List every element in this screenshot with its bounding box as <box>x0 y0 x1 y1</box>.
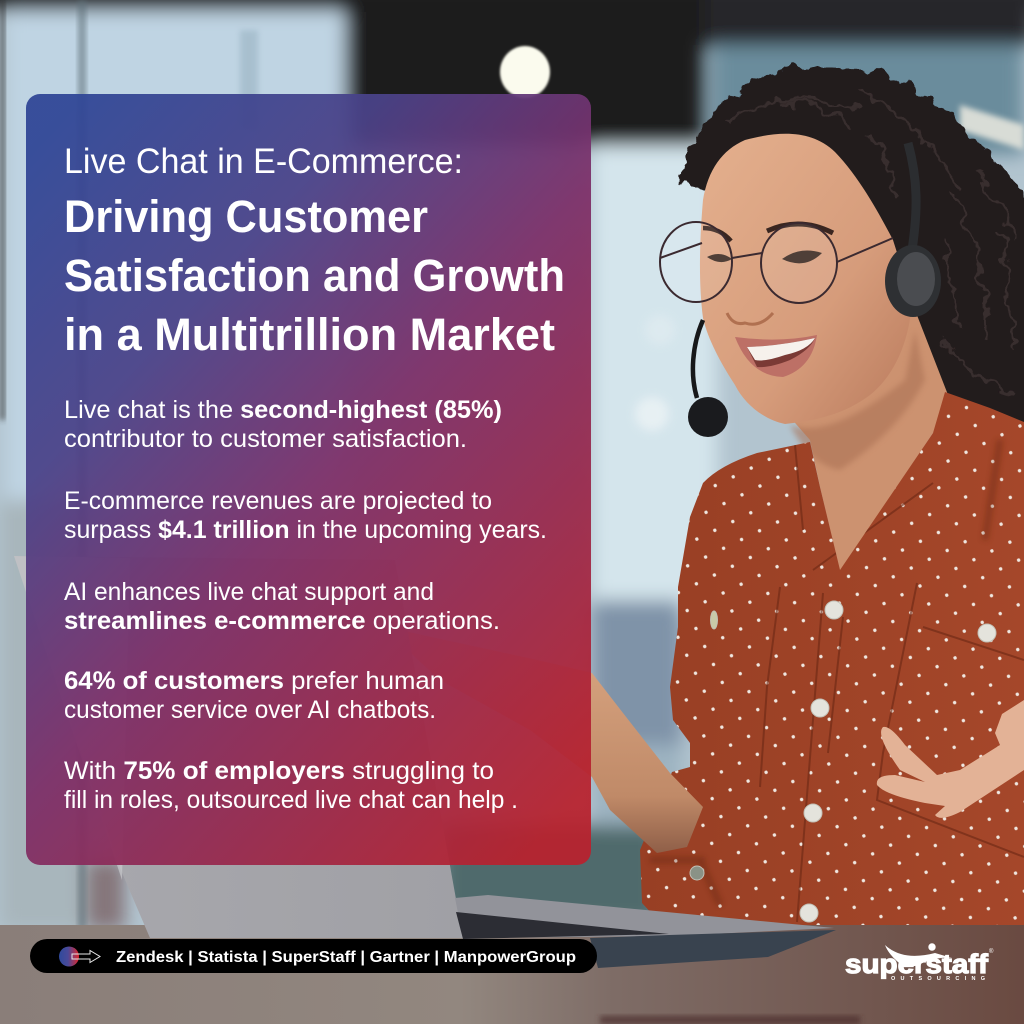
SuperStaff logo <box>845 943 994 982</box>
hair <box>678 65 1024 450</box>
smile <box>735 335 817 377</box>
stat: employers struggling: fill in roles, outsourced live chat can help . <box>64 786 518 814</box>
logo tagline: OUTSOURCING <box>891 976 985 982</box>
shirt buttons <box>690 601 996 922</box>
laptop front edge <box>590 930 836 968</box>
stat: e-commerce revenue: E-commerce revenues are projected to <box>64 487 492 515</box>
stat: e-commerce revenue: surpass $4.1 trillion in the upcoming years. <box>64 516 547 544</box>
stat: customer satisfaction: Live chat is the second-highest (85%) <box>64 396 502 424</box>
laptop keyboard <box>456 912 669 939</box>
face <box>700 134 912 424</box>
stat: human preference: 64% of customers prefer human <box>64 667 444 695</box>
laptop <box>14 556 836 968</box>
source list: Zendesk | Statista | SuperStaff | Gartner | ManpowerGroup <box>116 949 576 966</box>
glasses <box>660 222 893 303</box>
sources pill <box>30 939 597 973</box>
title: in a Multitrillion Market <box>64 309 555 360</box>
stat: customer satisfaction <box>64 396 502 453</box>
stat: customer satisfaction: contributor to customer satisfaction. <box>64 425 467 453</box>
woman <box>591 62 1024 925</box>
headset <box>688 143 941 437</box>
hand <box>877 700 1024 818</box>
stat: employers struggling <box>64 757 518 814</box>
logo wordmark: superstaff <box>845 949 989 979</box>
stat: AI enhancement: streamlines e-commerce operations. <box>64 607 500 635</box>
desk <box>0 925 1024 1024</box>
stat: AI enhancement: AI enhances live chat support and <box>64 578 434 606</box>
eyebrows, eyes, nose <box>703 224 833 324</box>
stat: employers struggling: With 75% of employers struggling to <box>64 757 494 785</box>
logo swoosh <box>885 945 952 966</box>
title: Live Chat in E-Commerce: <box>64 142 463 181</box>
stat: human preference: customer service over AI chatbots. <box>64 696 436 724</box>
neck <box>775 310 950 572</box>
title: Satisfaction and Growth <box>64 250 565 301</box>
title <box>64 142 565 360</box>
icon: gradient circle with arrow <box>59 946 100 966</box>
arm <box>380 625 703 853</box>
shirt <box>630 385 1024 930</box>
stat: AI enhancement <box>64 578 500 635</box>
laptop lid <box>14 556 463 938</box>
laptop base <box>455 895 834 938</box>
logo registered mark: ® <box>989 948 994 955</box>
title: Driving Customer <box>64 191 428 242</box>
blurred window lights <box>635 315 675 431</box>
translucent gradient panel <box>26 94 591 865</box>
stat: e-commerce revenue <box>64 487 547 544</box>
ceiling light <box>500 46 550 98</box>
stat: human preference <box>64 667 444 724</box>
